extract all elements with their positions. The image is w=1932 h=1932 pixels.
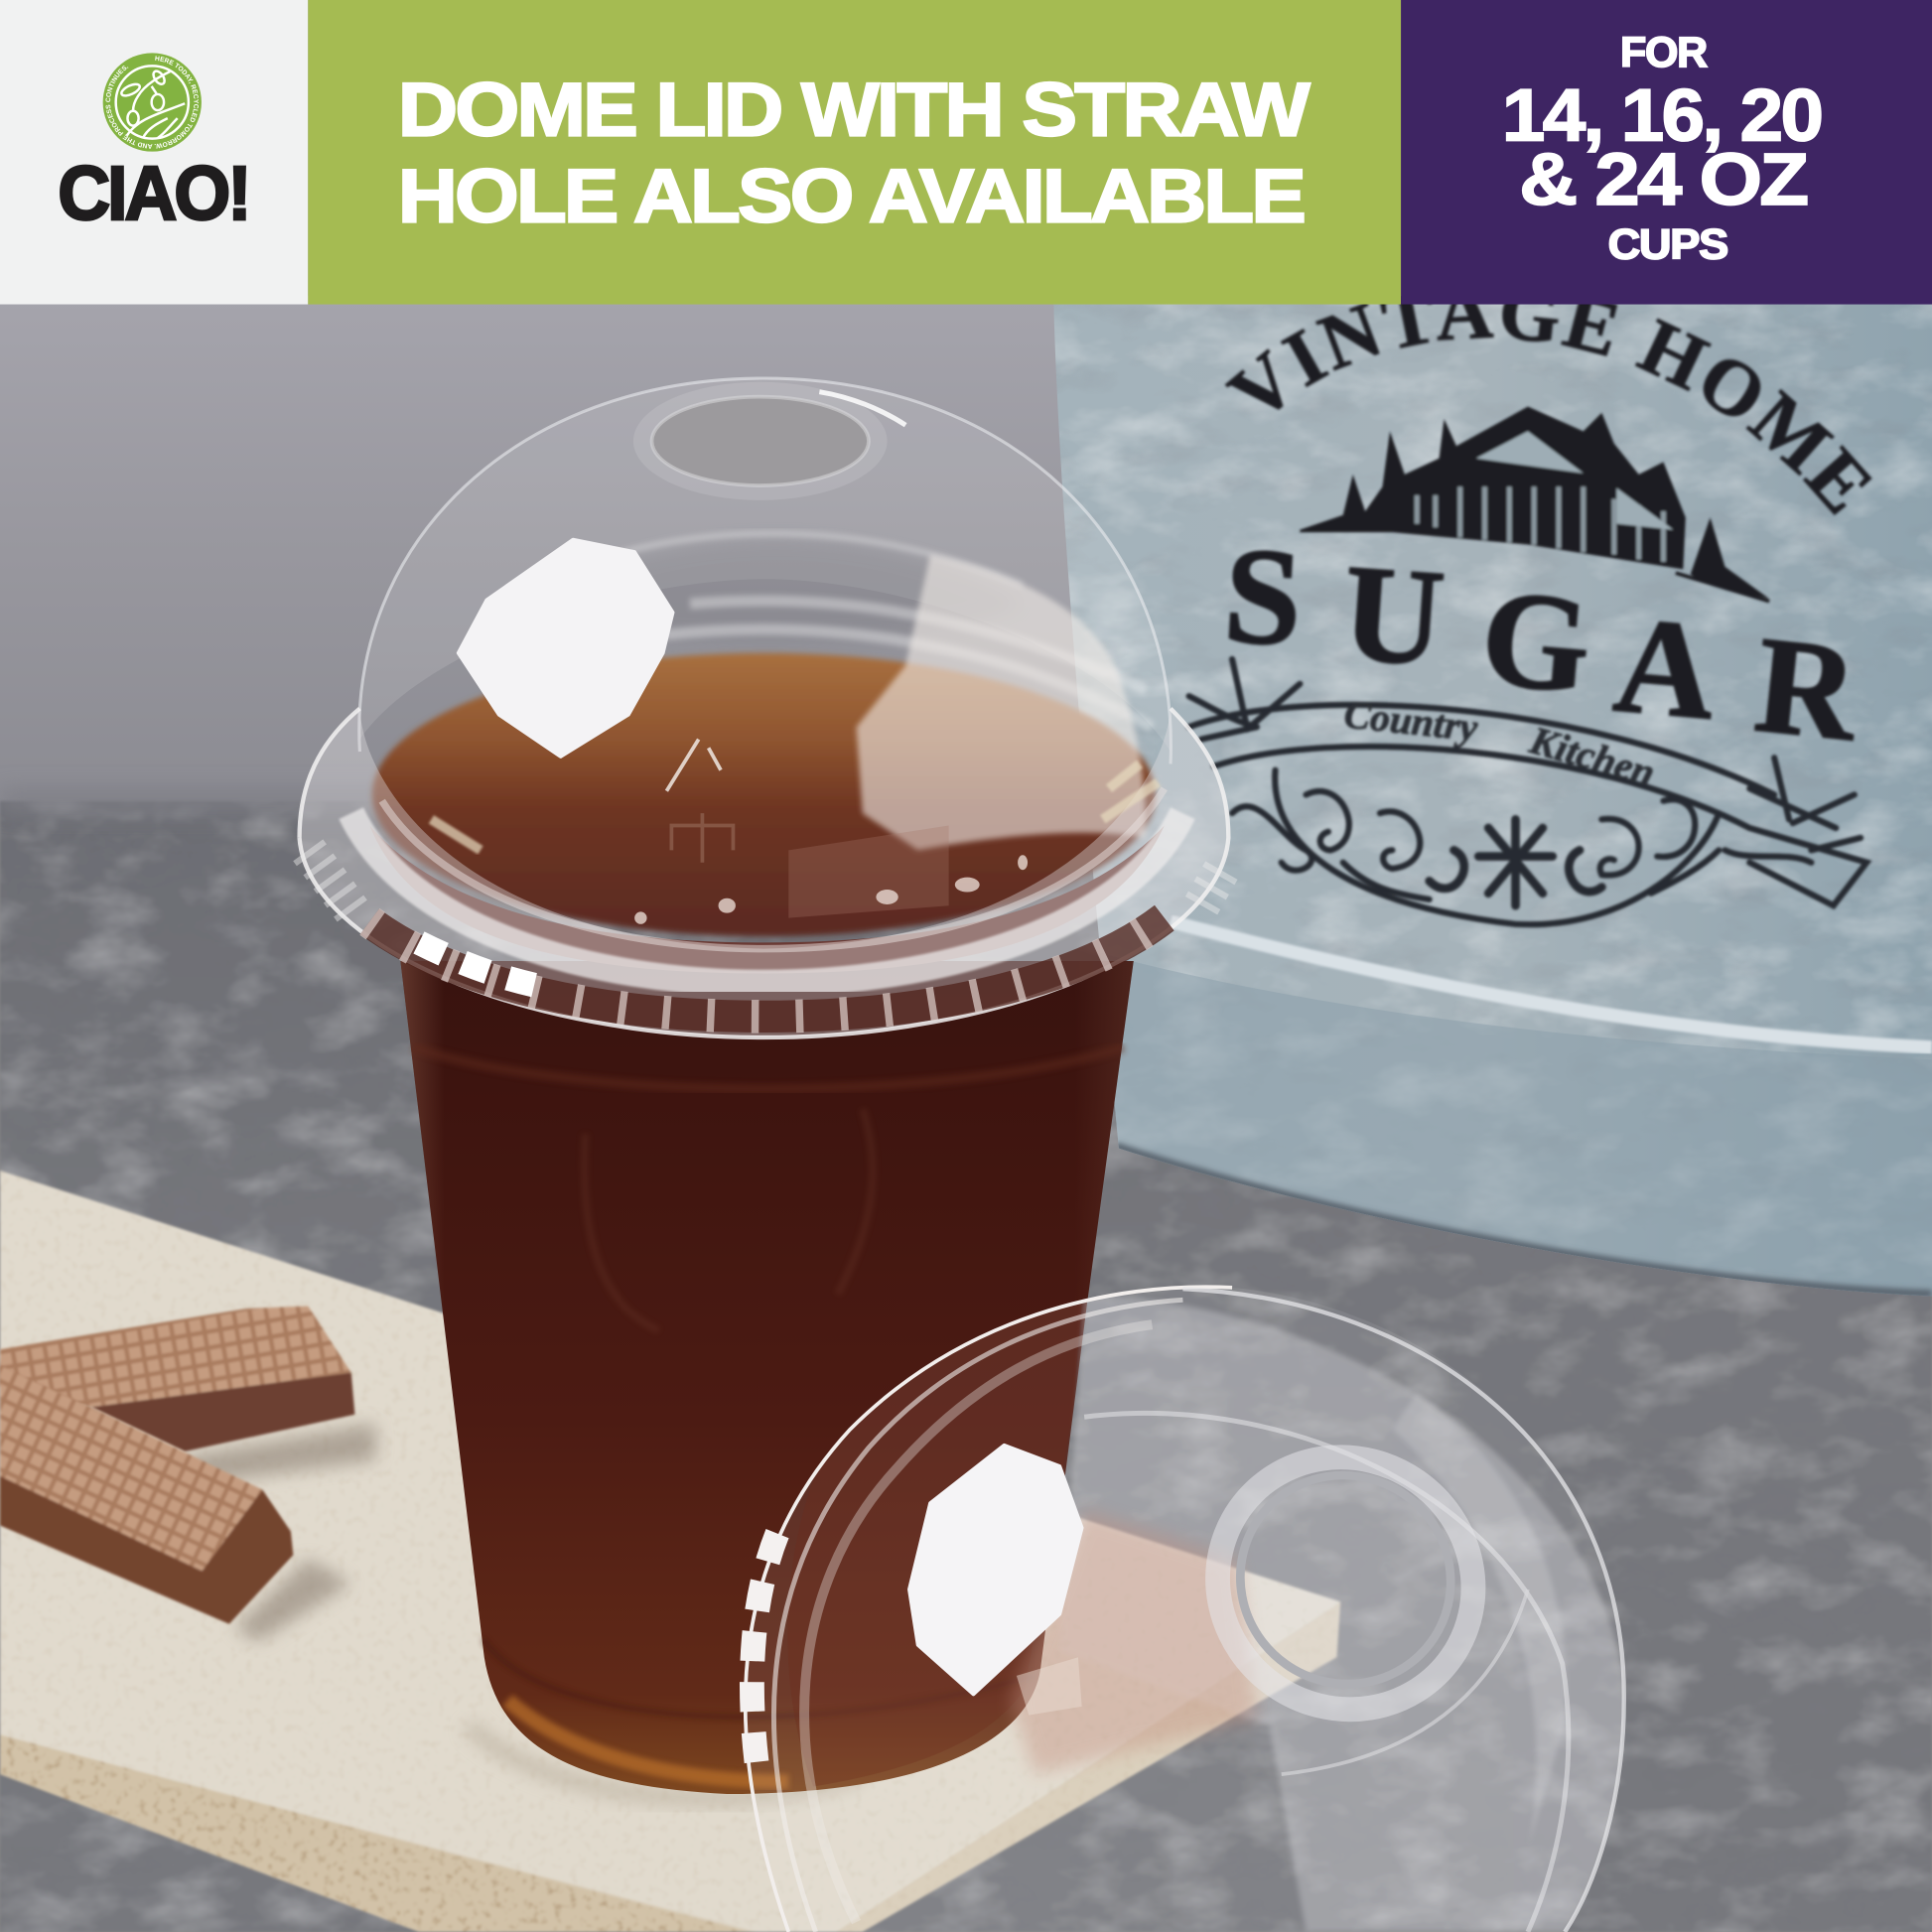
- rim tooth band: [369, 918, 1165, 1017]
- translucent shell haze: [747, 1288, 1620, 1932]
- straw hole ring: [1169, 1407, 1523, 1759]
- logo wordmark: CIAO!: [58, 151, 249, 236]
- right haze: [1059, 1294, 1626, 1932]
- tin text: sugar: [1227, 548, 1857, 743]
- tin ribbon text: Country: [1342, 692, 1480, 750]
- cup sizes: 14, 16, 20: [1502, 73, 1821, 156]
- rim windows: [752, 1522, 782, 1762]
- dome shell: [359, 378, 1171, 752]
- lower tea band through lid: [369, 826, 1165, 973]
- dome inner shade: [530, 539, 1023, 640]
- tin bottom dark edge: [1115, 1146, 1932, 1294]
- headline: HOLE ALSO AVAILABLE: [398, 154, 1304, 238]
- white band on dome: [1392, 1392, 1567, 1849]
- reflected table items: [788, 826, 949, 918]
- soft wall to counter horizon: [0, 791, 1059, 811]
- cup base line: [483, 1639, 1035, 1717]
- molded recycling text: [1017, 1657, 1082, 1716]
- purple size panel: [1401, 0, 1932, 305]
- rim outer edge: [300, 709, 1228, 1037]
- tin rim highlight: [1171, 921, 1932, 1047]
- recycling mark: [666, 740, 733, 863]
- green title panel: [308, 0, 1401, 305]
- tin text: sugar: R: [1749, 608, 1865, 770]
- tin ribbon and flourishes: [1189, 659, 1866, 924]
- inner rim ridge: [382, 788, 1165, 949]
- logo leaf emblem: [120, 69, 185, 138]
- wafer shadows: [185, 1423, 376, 1641]
- tin lower band shade: [1114, 960, 1932, 1279]
- logo panel: [0, 0, 308, 305]
- logo badge: [103, 53, 202, 152]
- straw hole: [633, 382, 905, 500]
- condensation droplets: [634, 855, 1028, 924]
- cup sizes: [1502, 29, 1821, 268]
- plastic cup with iced tea: [400, 961, 1134, 1794]
- tin text: sugar: G: [1476, 561, 1596, 723]
- cup shadow on board: [469, 1725, 863, 1798]
- tin text: sugar: S: [1221, 519, 1306, 675]
- pink board through lid: [1011, 1509, 1257, 1774]
- white glare patch: [459, 540, 673, 757]
- stone serving board: [0, 1171, 1343, 1932]
- rim outer body: [300, 709, 1228, 1037]
- board top surface: [0, 1171, 1340, 1932]
- background wall: [0, 296, 1932, 813]
- dome lid on cup: [300, 378, 1228, 1037]
- logo ring text: HERE TODAY, RECYCLED TOMORROW. AND THE PROCESS CONTINUES.: [105, 56, 199, 149]
- vintage sugar tin: [1054, 296, 1932, 1297]
- rim side teeth: [308, 850, 1226, 918]
- wafer biscuits: [0, 1307, 376, 1641]
- right side glare: [857, 554, 1146, 850]
- tin label print: [1183, 296, 1873, 929]
- headline: DOME LID WITH STRAW: [398, 69, 1311, 153]
- dome outline: [1182, 1289, 1624, 1932]
- tin label print: Kitchen: [1524, 718, 1660, 795]
- cream reflections on rim: [431, 763, 1159, 850]
- inner arc: [1084, 1413, 1569, 1932]
- cup shoulder line: [413, 1047, 1124, 1089]
- tin text: vintage home: VINTAGE HOME: [1223, 296, 1873, 516]
- orange base glow: [507, 1701, 788, 1782]
- cup sizes: FOR: [1620, 29, 1708, 75]
- rear wafer: [0, 1307, 354, 1451]
- loose dome lid in foreground: [702, 1269, 1651, 1932]
- dome inner band: [542, 534, 1023, 586]
- front wafer: [0, 1365, 293, 1624]
- cup sizes: CUPS: [1608, 221, 1727, 268]
- header bar: [0, 0, 1932, 305]
- cup sizes: & 24 OZ: [1519, 138, 1807, 220]
- dome outline: [359, 378, 1171, 763]
- tea seen through lid: [787, 1304, 1082, 1787]
- board front face: [0, 1735, 741, 1932]
- tin text: sugar: U: [1338, 536, 1449, 696]
- rim stripes: [746, 1287, 1232, 1932]
- rim band: [351, 813, 1182, 983]
- left white teeth: [419, 942, 554, 990]
- lid fold arc: [1282, 1589, 1528, 1774]
- tea surface seen through dome: [372, 653, 1156, 936]
- cup reflection: [585, 1109, 873, 1330]
- headline: [398, 69, 1311, 238]
- tin house illustration: [1300, 407, 1769, 602]
- tin text: sugar: A: [1609, 588, 1722, 749]
- concrete countertop: [0, 801, 1932, 1932]
- white glare patch: [909, 1446, 1082, 1694]
